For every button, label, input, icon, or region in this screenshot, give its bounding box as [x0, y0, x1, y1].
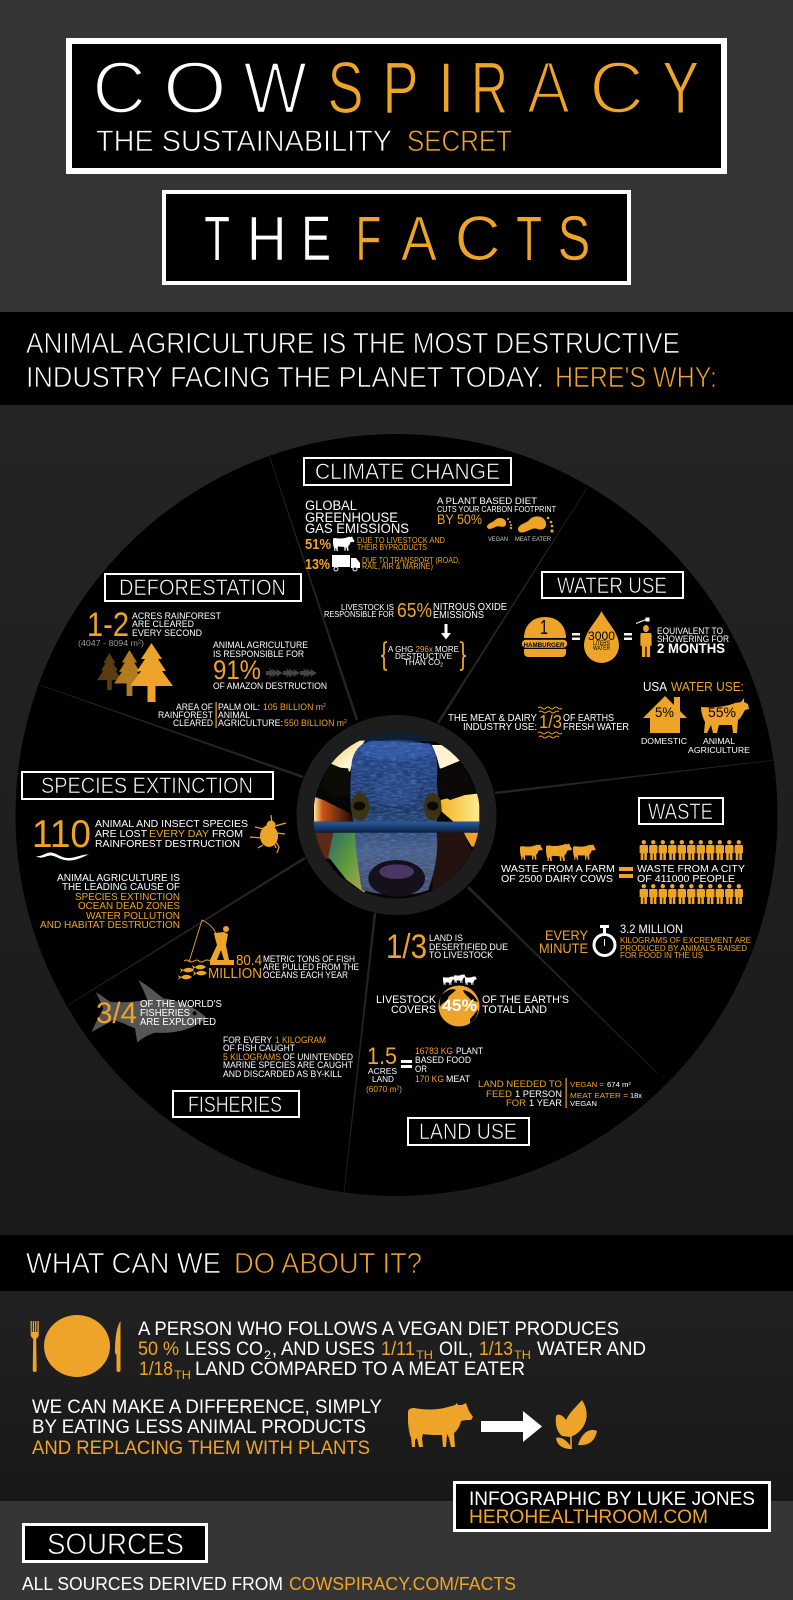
fish tonnage: ARE PULLED FROM THE: [263, 962, 359, 972]
fresh water stat: OF EARTHS: [563, 713, 614, 724]
nitrous oxide: RESPONSIBLE FOR: [324, 610, 394, 619]
vegan diet text: 1/13: [479, 1338, 513, 1360]
icon: water drop: [584, 611, 619, 663]
usa water use: [641, 679, 750, 755]
1.5 acres: [366, 1043, 483, 1094]
plant based diet: BY 50%: [437, 511, 482, 527]
land needed: [478, 1078, 642, 1109]
section: water use: [448, 572, 750, 755]
vegan diet text: LESS CO: [185, 1338, 263, 1360]
1.5 acres: 16783 KG: [415, 1046, 453, 1056]
box: The Facts: [164, 192, 629, 283]
bycatch text: OF UNINTENDED: [283, 1052, 353, 1062]
desertified stat: TO LIVESTOCK: [429, 950, 493, 960]
credit box: INFOGRAPHIC BY LUKE JONES: [469, 1489, 755, 1510]
band: what can we do about it: DO ABOUT IT?: [234, 1248, 422, 1280]
title box: Cowspiracy: [69, 41, 724, 171]
heading: species extinction: SPECIES EXTINCTION: [41, 773, 253, 798]
110 species: ANIMAL AND INSECT SPECIES: [95, 818, 248, 830]
icon: globe 45%: 45%: [442, 996, 477, 1015]
every minute: EVERY: [545, 927, 589, 943]
bycatch text: MARINE SPECIES ARE CAUGHT: [223, 1060, 353, 1070]
livestock covers: LIVESTOCK: [376, 994, 437, 1006]
band: what can we do about it: [0, 1235, 793, 1291]
icon: fisherman: [178, 920, 234, 980]
heading: waste: WASTE: [648, 799, 713, 824]
plant based diet: MEAT EATER: [515, 536, 551, 543]
area cleared: 2: [344, 719, 347, 725]
1.5 acres: 2: [396, 1086, 399, 1092]
land needed: MEAT EATER =: [570, 1091, 629, 1100]
GHG callout: DESTRUCTIVE: [395, 651, 452, 661]
centre ring: [296, 715, 496, 915]
title text: W: [243, 48, 307, 129]
icon: water drop: 3000: [588, 629, 615, 643]
icon: hamburger: [522, 617, 568, 657]
land needed: 674 m: [607, 1080, 628, 1089]
transport 13%: 13%: [305, 556, 330, 573]
area cleared: 2: [323, 703, 326, 709]
fisheries exploited: FISHERIES: [140, 1008, 190, 1019]
bycatch text: OF FISH CAUGHT: [223, 1043, 295, 1053]
fisheries exploited: 3/4: [96, 997, 137, 1030]
intro band: INDUSTRY FACING THE PLANET TODAY.: [26, 362, 544, 394]
leading cause text: WATER POLLUTION: [86, 910, 180, 922]
bycatch text: FOR EVERY: [223, 1035, 272, 1045]
leading cause text: [40, 872, 180, 931]
area cleared: AREA OF: [176, 702, 213, 712]
intro band: ANIMAL AGRICULTURE IS THE MOST DESTRUCTIVE: [26, 328, 680, 360]
box: The Facts: T: [516, 204, 542, 274]
acres stat: ARE CLEARED: [132, 619, 194, 629]
icon: person showering: [636, 618, 652, 657]
amazon stat: ANIMAL AGRICULTURE: [213, 640, 308, 650]
sources box: SOURCES: [47, 1528, 184, 1561]
transport 13%: DUE TO TRANSPORT (ROAD,: [362, 555, 460, 565]
waste comparison text: WASTE FROM A CITY: [637, 863, 745, 875]
livestock 51%: THEIR BYPRODUCTS: [357, 542, 427, 552]
area cleared: 550 BILLION m: [284, 718, 346, 728]
band: what can we do about it: WHAT CAN WE: [26, 1248, 221, 1280]
make a difference text: AND REPLACING THEM WITH PLANTS: [32, 1437, 370, 1459]
acres stat: 2: [138, 640, 141, 646]
GHG callout: THAN CO: [404, 657, 442, 667]
section: waste: [501, 798, 751, 960]
vegan diet text: [138, 1318, 646, 1382]
box: The Facts: H: [247, 204, 287, 274]
vegan diet text: AND USES: [281, 1338, 375, 1360]
bycatch text: 1 KILOGRAM: [275, 1035, 326, 1045]
heading: deforestation: DEFORESTATION: [119, 575, 286, 600]
shower text: SHOWERING FOR: [657, 634, 729, 644]
title text: O: [163, 48, 227, 129]
title text: I: [436, 48, 456, 129]
shower text: EQUIVALENT TO: [657, 626, 723, 636]
fish tonnage: METRIC TONS OF FISH: [263, 954, 355, 964]
section: fisheries: [92, 920, 359, 1117]
vegan diet text: 50 %: [138, 1338, 179, 1360]
icon: cow: 55%: [708, 704, 736, 720]
area cleared: AGRICULTURE:: [218, 718, 283, 728]
icon: hamburger: 1: [540, 617, 548, 639]
area cleared: ANIMAL: [218, 710, 250, 720]
fisheries exploited: OF THE WORLD'S: [140, 999, 222, 1010]
vegan diet text: 1/18: [139, 1358, 173, 1380]
icon: hamburger: HAMBURGER: [524, 643, 565, 649]
global emissions text: [305, 498, 409, 536]
land needed: LAND NEEDED TO: [478, 1079, 562, 1090]
icon: shark: [92, 980, 206, 1043]
icon: plant: [556, 1400, 597, 1449]
vegan diet text: WATER AND: [537, 1338, 646, 1360]
every minute: PRODUCED BY ANIMALS RAISED: [620, 943, 747, 953]
every minute: 3.2 MILLION: [620, 922, 683, 936]
livestock covers: TOTAL LAND: [482, 1004, 547, 1016]
arrow: [481, 1411, 542, 1442]
global emissions text: GREENHOUSE: [305, 510, 398, 525]
section: species extinction: [22, 772, 286, 931]
title text: C: [589, 48, 644, 129]
desertified stat: [386, 928, 508, 966]
area cleared: 105 BILLION m: [263, 702, 325, 712]
nitrous oxide: LIVESTOCK IS: [341, 603, 394, 612]
acres stat: EVERY SECOND: [132, 628, 202, 638]
1.5 acres: ): [399, 1084, 402, 1094]
nitrous oxide: NITROUS OXIDE: [433, 602, 507, 613]
110 species: RAINFOREST DESTRUCTION: [95, 838, 240, 850]
fresh water stat: [448, 707, 629, 738]
waste comparison text: OF 2500 DAIRY COWS: [501, 873, 613, 885]
amazon stat: IS RESPONSIBLE FOR: [213, 649, 304, 659]
leading cause text: SPECIES EXTINCTION: [75, 891, 180, 903]
livestock covers: OF THE EARTH'S: [482, 994, 569, 1006]
transport 13%: [305, 555, 460, 573]
plant based diet: CUTS YOUR CARBON FOOTPRINT: [437, 505, 556, 514]
leading cause text: AND HABITAT DESTRUCTION: [40, 919, 180, 931]
plant based diet: [437, 496, 556, 543]
vegan diet text: A PERSON WHO FOLLOWS A VEGAN DIET PRODUCES: [138, 1318, 619, 1340]
land needed: 18x: [630, 1091, 642, 1100]
110 species: EVERY DAY: [149, 828, 209, 840]
intro band: [0, 312, 793, 405]
livestock covers: [376, 994, 569, 1016]
make a difference text: [32, 1396, 382, 1459]
vegan diet text: LAND COMPARED TO A MEAT EATER: [195, 1358, 525, 1380]
110 species: 110: [32, 813, 91, 856]
fresh water stat: FRESH WATER: [563, 722, 629, 733]
usa water use: AGRICULTURE: [688, 745, 750, 755]
livestock 51%: [305, 535, 445, 553]
livestock covers: COVERS: [391, 1004, 436, 1016]
vegan diet text: TH: [514, 1348, 531, 1362]
every minute: KILOGRAMS OF EXCREMENT ARE: [620, 935, 751, 945]
vegan diet text: TH: [174, 1368, 191, 1382]
make a difference text: WE CAN MAKE A DIFFERENCE, SIMPLY: [32, 1396, 382, 1418]
nitrous oxide: 65%: [397, 600, 432, 622]
amazon stat: 91%: [213, 655, 261, 685]
sources line: [22, 1574, 516, 1594]
fish tonnage: OCEANS EACH YEAR: [263, 970, 348, 980]
vegan diet text: ,: [272, 1338, 277, 1360]
nitrous oxide: [324, 600, 507, 622]
amazon stat: OF AMAZON DESTRUCTION: [213, 681, 327, 691]
area cleared: PALM OIL:: [218, 702, 260, 712]
GHG callout: [381, 642, 466, 670]
waste comparison text: OF 411000 PEOPLE: [637, 873, 735, 885]
plant based diet: A PLANT BASED DIET: [437, 496, 537, 507]
icon: tick: [250, 815, 286, 853]
title text: C: [92, 48, 146, 129]
icon: trees: [97, 643, 173, 702]
land needed: 2: [628, 1081, 631, 1086]
110 species: ARE LOST: [95, 828, 148, 840]
fisheries exploited: ARE EXPLOITED: [140, 1017, 216, 1028]
fish tonnage: [208, 952, 359, 982]
make a difference text: BY EATING LESS ANIMAL PRODUCTS: [32, 1416, 366, 1438]
shower text: 2 MONTHS: [657, 640, 725, 656]
every minute: FOR FOOD IN THE US: [620, 950, 703, 960]
icon: cow: [408, 1403, 473, 1447]
livestock 51%: 51%: [305, 536, 331, 553]
acres stat: [78, 606, 221, 648]
1.5 acres: 170 KG: [415, 1074, 444, 1084]
fisheries exploited: [96, 997, 222, 1030]
110 species: FROM: [212, 828, 243, 840]
vegan diet text: OIL,: [439, 1338, 473, 1360]
vegan diet text: TH: [416, 1348, 433, 1362]
leading cause text: THE LEADING CAUSE OF: [62, 881, 180, 893]
intro band: HERE'S WHY:: [555, 362, 717, 394]
section: land use: [366, 928, 642, 1145]
bycatch text: AND DISCARDED AS BY-KILL: [223, 1069, 342, 1079]
1.5 acres: MEAT: [446, 1074, 470, 1084]
livestock 51%: DUE TO LIVESTOCK AND: [357, 535, 445, 545]
land needed: VEGAN: [570, 1099, 597, 1108]
bycatch text: 5 KILOGRAMS: [223, 1052, 281, 1062]
arrow down: [441, 624, 451, 640]
heading: climate change: CLIMATE CHANGE: [315, 459, 500, 484]
desertified stat: DESERTIFIED DUE: [429, 942, 508, 952]
every minute: [539, 922, 751, 960]
icon: water drop: LITERS: [593, 641, 610, 647]
leading cause text: ANIMAL AGRICULTURE IS: [57, 872, 180, 884]
main circle: [16, 434, 778, 1196]
nitrous oxide: EMISSIONS: [433, 610, 484, 621]
acres stat: (4047 - 8094 m: [78, 639, 132, 648]
desertified stat: 1/3: [386, 928, 427, 966]
land needed: 1 PERSON: [515, 1089, 562, 1100]
GHG callout: A GHG 296x MORE: [388, 644, 459, 654]
1.5 acres: 1.5: [367, 1043, 397, 1070]
GHG callout: 2: [440, 662, 443, 668]
box: The Facts: E: [301, 204, 331, 274]
area cleared: [158, 702, 347, 728]
credit box: HEROHEALTHROOM.COM: [469, 1507, 708, 1528]
area cleared: RAINFOREST: [158, 710, 213, 720]
every minute: MINUTE: [539, 940, 588, 956]
plant based diet: VEGAN: [488, 536, 508, 543]
desertified stat: LAND IS: [429, 933, 463, 943]
box: The Facts: S: [558, 204, 590, 274]
icon: plate and cutlery: [30, 1315, 120, 1377]
title text: Y: [662, 48, 699, 129]
usa water use: ANIMAL: [703, 736, 735, 746]
icon: water drop: WATER: [593, 646, 611, 652]
shower text: [657, 626, 729, 656]
land needed: FEED: [486, 1089, 512, 1100]
1.5 acres: LAND: [372, 1074, 394, 1084]
subtitle: SECRET: [407, 125, 512, 158]
title text: [92, 48, 699, 129]
amazon stat: [213, 640, 327, 691]
leading cause text: OCEAN DEAD ZONES: [78, 900, 180, 912]
land needed: VEGAN =: [570, 1080, 605, 1089]
fresh water stat: THE MEAT & DAIRY: [448, 713, 537, 724]
icon: stopwatch: [594, 925, 615, 956]
icon: people rows: [640, 840, 743, 904]
icon: house: 5%: [655, 704, 674, 720]
1.5 acres: ACRES: [368, 1066, 397, 1076]
fresh water stat: INDUSTRY USE:: [463, 722, 537, 733]
fish tonnage: MILLION: [208, 965, 262, 982]
vegan diet text: 2: [264, 1348, 271, 1362]
1.5 acres: OR: [415, 1064, 427, 1074]
1.5 acres: BASED FOOD: [415, 1055, 471, 1065]
acres stat: 1-2: [87, 606, 129, 644]
credit box: [454, 1482, 770, 1530]
squiggle: [36, 852, 89, 861]
box: The Facts: A: [401, 204, 437, 274]
box: The Facts: T: [204, 204, 230, 274]
fish tonnage: 80.4: [236, 952, 262, 969]
bycatch text: [223, 1035, 353, 1079]
acres stat: ACRES RAINFOREST: [132, 611, 221, 621]
global emissions text: GAS EMISSIONS: [305, 521, 409, 536]
title text: S: [328, 48, 364, 129]
acres stat: ): [141, 639, 144, 648]
waste comparison text: WASTE FROM A FARM: [501, 863, 615, 875]
heading: water use: WATER USE: [557, 573, 667, 598]
heading: land use: LAND USE: [419, 1119, 517, 1144]
title text: R: [471, 48, 508, 129]
section: climate change: [304, 458, 556, 670]
fresh water stat: 1/3: [539, 712, 562, 732]
box: The Facts: C: [455, 204, 501, 274]
waste comparison text: [501, 863, 745, 885]
sources line: ALL SOURCES DERIVED FROM: [22, 1574, 283, 1594]
title text: A: [527, 48, 570, 129]
icon: three cows: [520, 843, 596, 861]
equals: [572, 633, 632, 640]
subtitle: THE SUSTAINABILITY: [96, 125, 392, 158]
110 species: [32, 813, 248, 856]
transport 13%: RAIL, AIR & MARINE): [362, 561, 433, 571]
vegan diet text: 1/11: [381, 1338, 415, 1360]
area cleared: CLEARED: [173, 718, 213, 728]
1.5 acres: (6070 m: [366, 1084, 397, 1094]
usa water use: USA: [643, 679, 667, 694]
1.5 acres: PLANT: [456, 1046, 483, 1056]
land needed: FOR: [506, 1098, 526, 1109]
sources line: COWSPIRACY.COM/FACTS: [289, 1574, 516, 1594]
usa water use: WATER USE:: [671, 679, 744, 694]
land needed: 1 YEAR: [529, 1098, 562, 1109]
centre photo: cow behind rail: [313, 730, 480, 899]
box: The Facts: F: [356, 204, 381, 274]
icon: globe 45%: [438, 974, 480, 1026]
title text: P: [383, 48, 418, 129]
heading: fisheries: FISHERIES: [188, 1092, 282, 1117]
global emissions text: GLOBAL: [305, 498, 357, 513]
section: deforestation: [78, 574, 347, 728]
segment dividers: [40, 452, 775, 1192]
usa water use: DOMESTIC: [641, 736, 687, 746]
